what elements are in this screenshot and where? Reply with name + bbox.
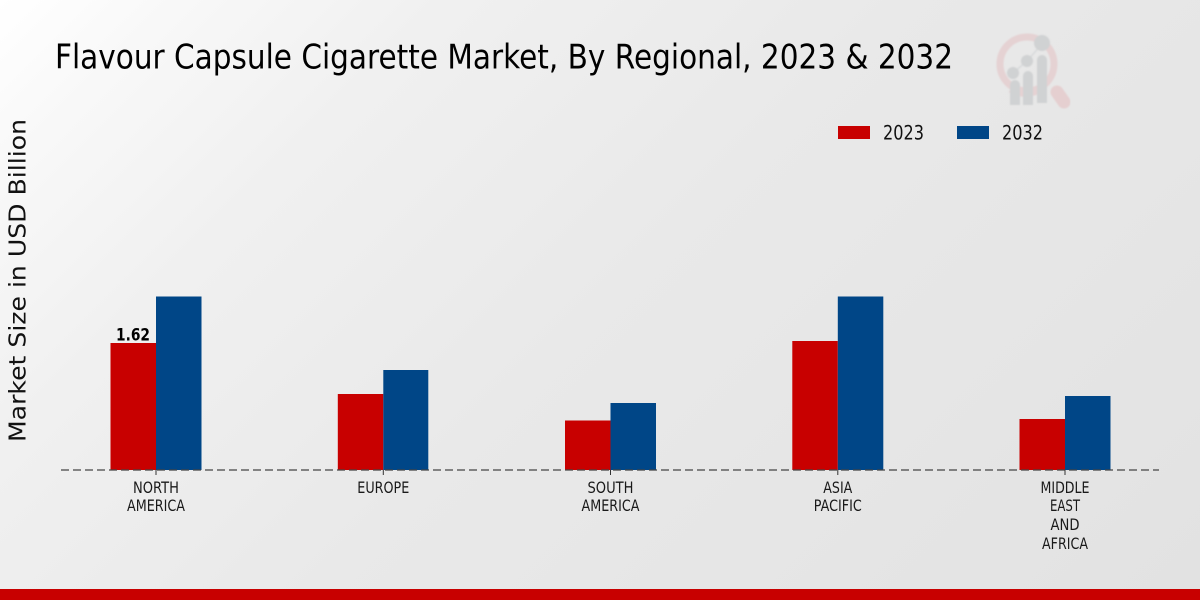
legend item: 2032: 2032 <box>1002 122 1043 144</box>
label: Middle East and Africa: EAST <box>1050 496 1080 515</box>
bars: South America <box>565 403 656 470</box>
bottom red bar <box>0 589 1200 600</box>
bars: Europe <box>338 370 428 470</box>
label: Asia Pacific: ASIA <box>823 478 852 497</box>
label: North America: NORTH <box>133 478 179 497</box>
bars: North America <box>110 296 202 470</box>
data label: 1.62: 1.62 <box>116 326 150 346</box>
x-axis labels <box>127 478 1090 553</box>
label: Asia Pacific: PACIFIC <box>814 496 862 515</box>
legend <box>838 122 1043 144</box>
label: North America: AMERICA <box>127 496 185 515</box>
bars: Asia Pacific <box>792 296 883 470</box>
label: South America: SOUTH <box>588 478 634 497</box>
legend item: 2032 <box>957 122 1043 144</box>
title: Flavour Capsule Cigarette Market, By Regional, 2023 & 2032 <box>55 38 953 78</box>
legend item: 2023: 2023 <box>883 122 924 144</box>
y-axis label: Market Size in USD Billion <box>6 119 32 442</box>
label: Middle East and Africa: MIDDLE <box>1040 478 1090 497</box>
label: South America: AMERICA <box>582 496 640 515</box>
bars: Middle East and Africa <box>1020 396 1110 470</box>
label: Middle East and Africa: AND <box>1050 515 1080 534</box>
legend item: 2023 <box>838 122 924 144</box>
label: Middle East and Africa: AFRICA <box>1042 534 1088 553</box>
bar chart <box>61 296 1159 475</box>
label: Europe: EUROPE <box>357 478 409 497</box>
watermark logo icon <box>1000 35 1064 105</box>
